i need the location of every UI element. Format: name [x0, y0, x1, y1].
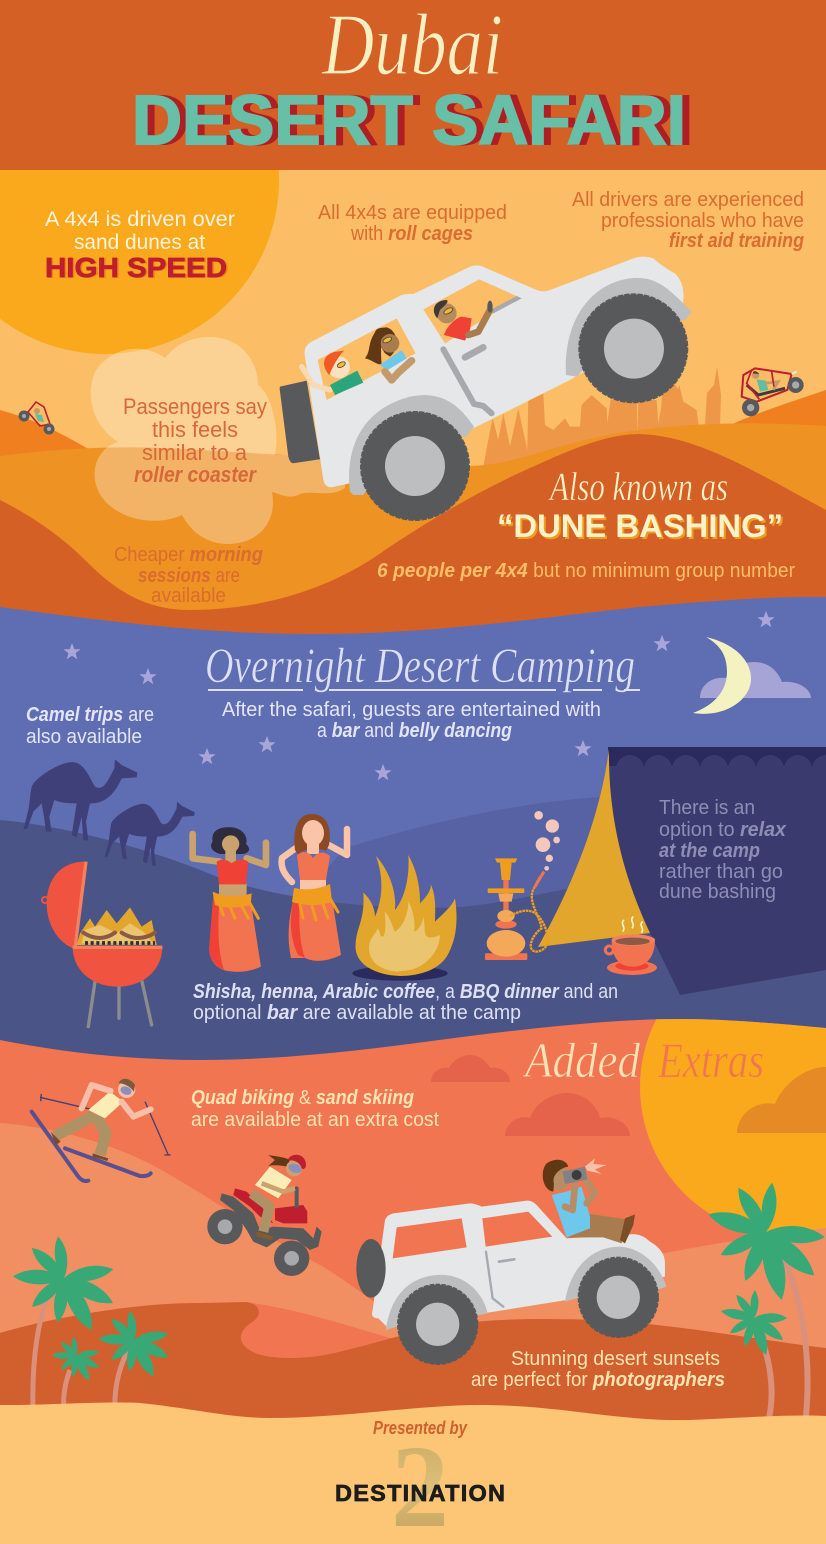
icon: barbecue grill — [42, 862, 162, 1027]
heading: overnight desert camping: Overnight Desert Camping — [205, 637, 635, 693]
crescent moon — [693, 637, 751, 714]
dune buggy: left — [18, 402, 54, 434]
text: entertainment — [222, 698, 601, 742]
heading: extras: Extras — [657, 1032, 764, 1088]
text: relax at the camp: dune bashing — [659, 880, 776, 903]
front dune — [0, 434, 826, 640]
text: camel trips: Camel trips are — [26, 703, 154, 726]
text: morning sessions — [114, 543, 263, 607]
text: quad biking: Quad biking & sand skiing — [191, 1086, 414, 1109]
text: entertainment: a bar and belly dancing — [317, 719, 512, 742]
palm trees: right — [691, 1168, 826, 1418]
title: Desert Safari: DESERT SAFARI — [137, 81, 691, 159]
sun — [0, 170, 279, 354]
left back dune — [0, 410, 90, 470]
text: roller coaster: similar to a — [142, 440, 247, 465]
heading: also known as: Also known as — [548, 464, 728, 509]
wheel rear — [398, 1284, 478, 1364]
icon: campfire — [352, 855, 457, 981]
stars — [63, 611, 775, 780]
icon: camels — [23, 759, 195, 866]
text: relax at the camp: option to relax — [659, 818, 788, 841]
panel: footer — [0, 1402, 826, 1544]
tent flap — [538, 749, 650, 947]
heading: dune bashing: “DUNE BASHING” — [499, 510, 785, 546]
text: roll cages: with roll cages — [350, 222, 473, 245]
text: morning sessions: sessions are — [138, 564, 240, 587]
text: morning sessions: Cheaper morning — [114, 543, 263, 566]
cloud large — [505, 1093, 630, 1136]
palm trees: left — [13, 1236, 171, 1410]
text: quad biking — [191, 1086, 439, 1131]
4x4 with photographer — [356, 1158, 667, 1364]
heading: dune bashing: “DUNE BASHING” — [497, 508, 783, 544]
icon: sand skier — [32, 1079, 171, 1181]
night cloud — [700, 662, 811, 698]
text: roll cages — [318, 201, 507, 245]
text: camp facilities: Shisha, henna, Arabic coffee, a BBQ dinner and an — [193, 980, 618, 1003]
text: camel trips — [26, 703, 154, 748]
driver — [434, 300, 493, 341]
text: photographers: Stunning desert sunsets — [511, 1347, 720, 1370]
title: Desert Safari: DESERT SAFARI — [135, 81, 689, 159]
text: high speed: sand dunes at — [74, 231, 205, 254]
rear wheel — [361, 412, 469, 520]
dancer 1 — [193, 827, 266, 972]
text: high speed — [45, 208, 235, 284]
text: photographers: are perfect for photographers — [471, 1368, 725, 1391]
photographer — [543, 1158, 635, 1243]
text: first aid: All drivers are experienced — [572, 188, 804, 211]
text: roller coaster — [123, 394, 268, 487]
panel: added extras — [0, 1019, 826, 1416]
title: Desert Safari: DESERT SAFARI — [132, 81, 686, 159]
logo: destination 2 — [335, 1421, 505, 1544]
dune buggy: right — [742, 368, 804, 416]
front wheel — [579, 294, 688, 403]
light hill — [0, 1123, 826, 1420]
text: camp facilities — [193, 980, 618, 1024]
text: high speed: HIGH SPEED — [45, 252, 227, 283]
middle hill — [300, 796, 620, 960]
city skyline — [483, 367, 721, 483]
text: quad biking: are available at an extra cost — [191, 1108, 439, 1131]
passenger: rear left — [302, 351, 363, 395]
text: high speed: HIGH SPEED — [46, 252, 228, 284]
header panel — [0, 0, 826, 172]
icon: coffee cup — [605, 917, 657, 975]
cloud small — [431, 1055, 510, 1082]
text: roller coaster: Passengers say — [123, 394, 268, 419]
icon: shisha pipe — [485, 811, 560, 960]
dust cloud — [91, 337, 345, 544]
text: morning sessions: available — [151, 584, 226, 607]
text: camel trips: also available — [26, 725, 142, 748]
text: first aid: first aid training — [669, 229, 804, 252]
text: relax at the camp: There is an — [659, 796, 755, 819]
text: photographers — [471, 1347, 725, 1391]
logo: destination 2: DESTINATION — [335, 1480, 505, 1506]
dark foreground dune — [0, 1302, 826, 1440]
panel: dune bashing — [0, 170, 826, 610]
title: Desert Safari: DESERT SAFARI — [139, 81, 693, 159]
icon: quad bike — [207, 1155, 322, 1276]
text: entertainment: After the safari, guests are entertained with — [222, 698, 601, 721]
text: camp facilities: optional bar are available at the camp — [193, 1001, 521, 1024]
text: presented by: Presented by — [373, 1418, 468, 1438]
passenger: rear right — [365, 327, 412, 380]
text: relax at the camp: rather than go — [659, 860, 783, 883]
heading: added: Added — [522, 1032, 641, 1088]
wheel front — [578, 1257, 658, 1337]
heading underline — [208, 689, 640, 691]
text: relax at the camp — [659, 796, 788, 903]
text: high speed: A 4x4 is driven over — [45, 208, 235, 231]
coral pocket — [232, 1302, 397, 1364]
panel: overnight desert camping — [0, 597, 826, 1070]
dark foreground hill — [0, 820, 826, 1070]
text: first aid: professionals who have — [601, 209, 804, 232]
text: roll cages: All 4x4s are equipped — [318, 201, 507, 224]
right back dune — [730, 390, 826, 440]
mid dune — [0, 423, 826, 640]
text: roller coaster: this feels — [152, 417, 238, 442]
text: people per 4x4: 6 people per 4x4 but no minimum group number — [377, 559, 795, 582]
cloud on sun — [737, 1067, 826, 1133]
tent — [538, 747, 826, 995]
sunset sun — [640, 1019, 826, 1232]
dancer 2 — [282, 814, 347, 961]
text: first aid — [572, 188, 804, 252]
text: relax at the camp: at the camp — [659, 839, 760, 862]
text: roller coaster: roller coaster — [134, 462, 257, 487]
4x4 vehicle — [280, 257, 692, 520]
